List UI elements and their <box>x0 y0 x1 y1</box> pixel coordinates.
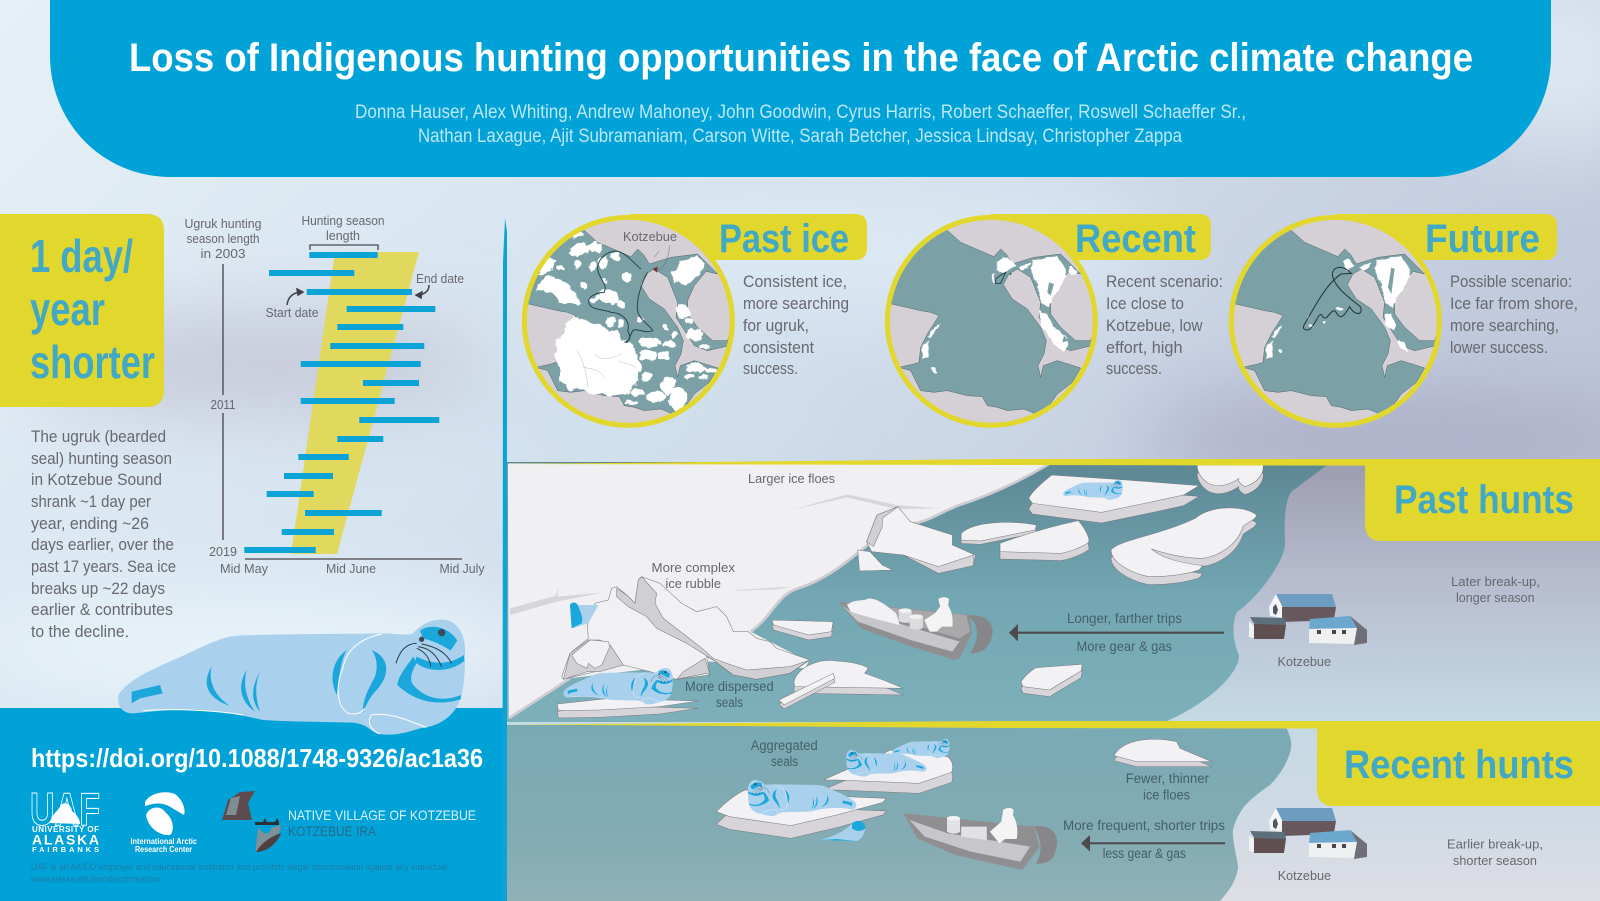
chart labels: length <box>326 228 360 243</box>
description <box>1106 272 1223 378</box>
annotation: more frequent shorter trips: More frequent, shorter trips <box>1063 818 1225 833</box>
trend band <box>291 252 419 554</box>
title: Loss of Indigenous hunting opportunities in the face of Arctic climate change <box>129 36 1473 80</box>
text block: season summary: year, ending ~26 <box>31 514 149 533</box>
season bars <box>244 252 439 553</box>
seals aggregated on floes <box>748 739 949 816</box>
heading: Past hunts <box>1394 478 1574 522</box>
disclaimer <box>30 862 449 884</box>
text block: season summary: past 17 years. Sea ice <box>31 557 176 576</box>
text block: season summary: breaks up ~22 days <box>31 579 165 598</box>
DOI link: https://doi.org/10.1088/1748-9326/ac1a36 <box>31 743 483 773</box>
logo: UAF: UAF <box>30 783 100 835</box>
chart labels: in 2003 <box>200 246 246 261</box>
chart labels: End date <box>416 271 464 286</box>
annotation: earlier break-up: shorter season <box>1453 853 1537 868</box>
chart labels: season length <box>186 231 260 246</box>
floe under seal <box>557 706 698 718</box>
annotation: more frequent shorter trips <box>1063 818 1225 861</box>
annotation: fewer thinner floes: Fewer, thinner <box>1126 771 1209 786</box>
logo: UAF: UNIVERSITY OF <box>32 825 99 834</box>
annotation: later break-up: longer season <box>1456 590 1535 605</box>
left ridge <box>510 587 793 615</box>
annotation: larger ice floes: Larger ice floes <box>748 471 835 486</box>
more complex ice rubble <box>562 577 810 679</box>
heading tab <box>1317 728 1600 806</box>
headline box: 1 day/year shorter: shorter <box>30 336 155 388</box>
panel: recent hunts scene <box>507 721 1600 901</box>
headline box: 1 day/year shorter: year <box>30 283 105 335</box>
chart labels: Ugruk hunting <box>184 216 262 231</box>
small face seal <box>570 602 598 628</box>
annotation: aggregated seals: Aggregated <box>751 738 818 753</box>
bracket <box>310 245 378 250</box>
annotation: longer farther trips: Longer, farther trips <box>1067 611 1182 626</box>
heading tab <box>630 214 867 260</box>
chart labels: Start date <box>266 305 318 320</box>
axes <box>223 264 462 559</box>
annotation: longer farther trips: More gear & gas <box>1076 639 1172 654</box>
annotation: aggregated seals <box>751 738 818 769</box>
place label: Kotzebue <box>623 229 677 244</box>
heading tab <box>1335 214 1557 260</box>
headline box: 1 day/year shorter <box>0 214 164 407</box>
logo: UAF: ALASKA <box>32 832 99 848</box>
sea and land <box>507 725 1600 901</box>
annotation: later break-up <box>1451 574 1540 605</box>
description: Possible scenario: <box>1450 272 1572 291</box>
chart labels: 2019 <box>209 544 237 559</box>
annotation: earlier break-up <box>1447 836 1543 868</box>
panel: past ice map <box>521 214 867 425</box>
description <box>743 272 849 378</box>
annotation: earlier break-up: Earlier break-up, <box>1447 836 1543 852</box>
description: for ugruk, <box>743 316 809 335</box>
logo: Native Village of Kotzebue / Kotzebue IRA: NATIVE VILLAGE OF KOTZEBUE <box>288 807 476 823</box>
fewer thinner floe <box>1114 739 1212 767</box>
disclaimer: UAF is an AA/EO employer and educational institution and prohibits illegal discrimination against any individual: <box>31 862 449 872</box>
header banner <box>50 0 1551 177</box>
headline box: 1 day/year shorter: 1 day/ <box>30 230 133 282</box>
text block: season summary: shrank ~1 day per <box>31 492 151 511</box>
annotation: more dispersed seals: More dispersed <box>685 679 774 694</box>
panel: recent ice map <box>884 214 1223 425</box>
floes <box>772 507 1037 709</box>
panel: past hunts scene <box>507 459 1600 725</box>
heading: Recent hunts <box>1344 743 1574 787</box>
logo: UAF: FAIRBANKS <box>32 845 99 854</box>
description: Ice far from shore, <box>1450 294 1578 313</box>
annotation: aggregated seals: seals <box>771 754 798 769</box>
arrows: start and end date <box>287 285 429 305</box>
annotation: more complex ice rubble <box>652 560 736 591</box>
description: Recent scenario: <box>1106 272 1223 291</box>
authors: Nathan Laxague, Ajit Subramaniam, Carson Witte, Sarah Betcher, Jessica Lindsay, Christopher Zappa <box>418 126 1182 147</box>
chart labels: 2011 <box>210 397 236 412</box>
annotation: more frequent shorter trips: less gear & gas <box>1103 846 1186 861</box>
top yellow rule <box>508 459 1600 466</box>
text block: season summary: in Kotzebue Sound <box>31 470 162 489</box>
chart labels: Mid July <box>440 561 485 576</box>
description <box>1450 272 1578 357</box>
logo: International Arctic Research Center <box>130 792 197 854</box>
logo: International Arctic Research Center: Research Center <box>135 844 193 854</box>
annotation: fewer thinner floes: ice floes <box>1143 788 1190 802</box>
description: lower success. <box>1450 338 1548 357</box>
seal on floe, dispersed <box>563 668 673 704</box>
logo: Native Village of Kotzebue / Kotzebue IRA <box>222 791 476 852</box>
heading tab <box>990 214 1211 260</box>
logo: UAF <box>30 783 100 854</box>
text block: season summary <box>31 427 176 641</box>
annotation: more dispersed seals: seals <box>716 695 743 710</box>
authors: Donna Hauser, Alex Whiting, Andrew Mahoney, John Goodwin, Cyrus Harris, Robert Schaeffer, Roswell Schaeffer Sr., <box>355 102 1246 123</box>
chart labels <box>184 213 485 576</box>
arrow: shorter trips <box>1081 835 1225 852</box>
disclaimer: www.alaska.edu/nondiscrimination/. <box>30 874 163 884</box>
description: consistent <box>743 338 814 357</box>
description: Consistent ice, <box>743 272 847 291</box>
map <box>1228 214 1439 425</box>
description: more searching <box>743 294 849 313</box>
description: effort, high <box>1106 338 1182 357</box>
swimming seal <box>820 821 865 841</box>
description: success. <box>1106 359 1162 378</box>
vertical divider <box>502 218 507 901</box>
chart: hunting season length by year <box>184 213 485 576</box>
description: Kotzebue, low <box>1106 316 1203 335</box>
annotation: more complex ice rubble: ice rubble <box>666 576 721 591</box>
icon: Kotzebue houses <box>1249 808 1367 859</box>
arrow: longer trips <box>1009 624 1224 642</box>
icon: Kotzebue houses <box>1249 594 1367 645</box>
lower yellow rule <box>510 721 1600 729</box>
footer panel <box>0 708 505 901</box>
map <box>521 214 732 425</box>
text block: season summary: earlier & contributes <box>31 600 173 619</box>
seal on far floe <box>1063 480 1123 500</box>
boat: shorter trips <box>904 808 1057 870</box>
chart labels: Hunting season <box>302 213 384 228</box>
scene in source coordinates <box>508 463 1263 718</box>
sea ice sheet <box>508 463 1050 718</box>
chart labels: Mid June <box>326 561 376 576</box>
text block: season summary: days earlier, over the <box>31 535 174 554</box>
heading: Future <box>1425 217 1540 261</box>
boat: longer trips <box>838 597 993 660</box>
authors <box>355 102 1246 147</box>
sea and land <box>507 462 1600 725</box>
place label: Kotzebue <box>1278 654 1331 669</box>
text block: season summary: The ugruk (bearded <box>31 427 166 446</box>
panel: future ice map <box>1228 214 1578 425</box>
heading: Past ice <box>719 217 849 261</box>
logo: Native Village of Kotzebue / Kotzebue IRA: KOTZEBUE IRA <box>288 823 377 839</box>
annotation: longer farther trips <box>1067 611 1182 654</box>
large bearded seal illustration <box>118 620 465 735</box>
map <box>884 214 1095 425</box>
text block: season summary: seal) hunting season <box>31 449 172 468</box>
text block: season summary: to the decline. <box>31 622 129 641</box>
floes and boat <box>716 750 1057 870</box>
chart labels: Mid May <box>220 561 268 576</box>
logo: International Arctic Research Center: International Arctic <box>130 836 197 846</box>
annotation: later break-up: Later break-up, <box>1451 574 1540 589</box>
annotation: fewer thinner floes <box>1126 771 1209 802</box>
heading tab <box>1365 465 1600 541</box>
heading: Recent <box>1075 217 1196 261</box>
annotation: more complex ice rubble: More complex <box>652 560 736 575</box>
description: more searching, <box>1450 316 1559 335</box>
place label: Kotzebue <box>1278 868 1331 883</box>
annotation: more dispersed seals <box>685 679 774 710</box>
description: Ice close to <box>1106 294 1184 313</box>
description: success. <box>743 359 798 378</box>
